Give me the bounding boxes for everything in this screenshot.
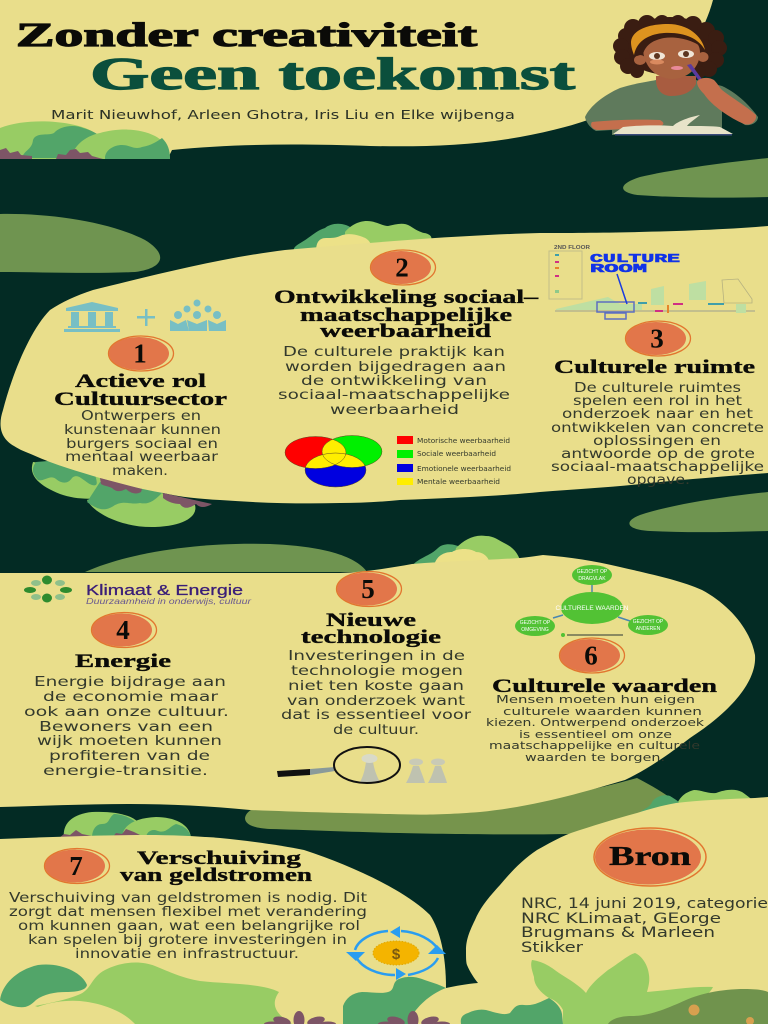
illustration: bottom foliage [0,953,768,1024]
decorative olive band [245,778,676,834]
section 6 text: Mensen moeten hun eigen [496,693,695,706]
section 1 text: Ontwerpers en [81,408,201,424]
badge 5: 5 [361,574,375,604]
section 4 text: Energie bijdrage aan [34,674,226,690]
bush middle center [412,536,520,566]
section 6 text [486,693,705,764]
left iris [654,53,660,59]
section 5 text: niet ten koste gaan [288,678,464,694]
section 7 text: om kunnen gaan, wat een belangrijke rol [18,918,360,934]
section 3 text: opgave. [627,472,690,488]
bron badge: Bron [609,841,691,871]
lips [671,66,683,70]
right iris [683,51,689,57]
section 5 heading: technologie [301,627,441,648]
diagram: culturele waarden: GEZICHT OP [633,619,664,625]
bron text: Brugmans & Marleen [521,925,715,941]
section 5 text: van onderzoek want [287,693,465,709]
section 2 text [278,344,510,418]
badge 5 [336,572,402,606]
illustration: person [585,15,758,136]
badge 6 [560,638,624,673]
section 7 heading: Verschuiving [137,848,302,869]
section 6 text: is essentieel om onze [519,728,672,741]
section 4 text: energie-transitie. [43,763,208,779]
diagram: culturele waarden: OMGEVING [521,627,549,633]
section 1 text: maken. [112,463,168,479]
bush lower left [59,812,191,838]
section 6 heading: Culturele waarden [492,676,718,697]
headband [631,24,705,55]
section 2 text: De culturele praktijk kan [283,344,505,360]
purple plants on bush [100,478,212,508]
cheek [650,60,664,64]
neck and chest [656,76,696,96]
diagram: culturele waarden: GEZICHT OP [520,620,551,626]
section 2 heading: maatschappelijke [300,305,512,326]
section 1 heading: Cultuursector [54,389,228,410]
right ear [698,52,708,62]
title line 2: Geen toekomst [90,48,576,99]
shirt [585,80,758,135]
section 2 text: sociaal-maatschappelijke [278,387,510,403]
badge 3: 3 [650,324,664,354]
diagram: culturele waarden: DRAGVLAK [578,576,606,582]
venn legend: Mentale weerbaarheid [417,478,500,486]
section 4 text [24,674,229,779]
pen [687,64,709,90]
diagram: culturele waarden: GEZICHT OP [577,569,608,575]
authors: Marit Nieuwhof, Arleen Ghotra, Iris Liu en Elke wijbenga [51,108,515,122]
section 7 text [9,890,367,962]
face [643,37,700,79]
venn legend: Motorische weerbaarheid [417,437,510,445]
section 3 text [551,380,764,488]
panel: header background [0,0,713,158]
section 5 text: Investeringen in de [288,648,465,664]
section 3 heading: Culturele ruimte [554,357,755,378]
section 5 heading [301,610,441,648]
icon: money cycle: $ [392,946,401,963]
culture room label: ROOM [590,262,647,276]
badge 1: 1 [133,338,147,368]
decorative olive hill right middle [629,492,768,532]
venn legend: Emotionele weerbaarheid [417,465,511,473]
section 6 text: maatschappelijke en culturele [489,739,700,752]
section 5 text: technologie mogen [291,663,463,679]
logo: Klimaat en Energie [24,576,251,606]
venn diagram [285,436,382,487]
diagram: culturele waarden [515,565,668,637]
badge 2: 2 [395,252,409,282]
section 3 text: De culturele ruimtes [574,380,741,396]
bron text: NRC, 14 juni 2019, categorie [521,896,768,912]
section 3 text: sociaal-maatschappelijke [551,459,764,475]
section 1 text: kunstenaar kunnen [64,422,221,438]
section 4 text: de economie maar [43,689,219,705]
section 5 text [281,648,472,738]
left ear [634,55,646,65]
panel: upper yellow blob [1,226,768,503]
hair [613,15,727,78]
diagram: culturele waarden: ANDEREN [636,626,661,632]
section 5 heading: Nieuwe [326,610,416,631]
right arm and hand [697,78,756,125]
venn legend [397,436,511,486]
bush lower right [636,790,756,817]
hair fringe [637,34,700,56]
section 7 text: Verschuiving van geldstromen is nodig. Dit [9,890,367,906]
section 4 text: Bewoners van een [39,719,213,735]
section 2 heading [274,287,539,342]
panel: lower left yellow blob [0,835,446,1024]
floor plan: culture room: 2ND FLOOR [554,245,590,251]
section 6 text: culturele waarden kunnen [503,705,702,718]
decorative olive hill right top [623,158,768,198]
left eye [649,52,665,60]
bush upper center [294,221,431,252]
bron text: Stikker [521,940,583,956]
badge 4: 4 [116,615,130,645]
bron badge [594,828,706,886]
icon: people [170,300,226,331]
panel: middle yellow blob [0,555,755,815]
logo: Klimaat en Energie: Duurzaamheid in onderwijs, cultuur [86,597,251,606]
badge 7 [44,848,110,884]
floor plan: culture room [549,245,755,319]
section 7 heading: van geldstromen [120,865,313,886]
section 2 heading: weerbaarheid [320,321,492,342]
section 2 text: worden bijgedragen aan [285,359,506,375]
icon: money cycle [346,926,446,980]
venn legend: Sociale weerbaarheid [417,450,496,458]
section 2 text: de ontwikkeling van [301,373,487,389]
panel: lower right yellow blob [408,797,768,1024]
section 3 text: onderzoek naar en het [562,406,753,422]
section 2 text: weerbaarheid [330,402,459,418]
section 4 text: wijk moeten kunnen [37,733,222,749]
section 3 text: spelen een rol in het [573,393,742,409]
culture room label [590,252,680,276]
icon: magnifier with pawns [277,747,447,783]
left forearm [591,120,663,130]
section 5 text: de cultuur. [333,722,419,738]
section 3 text: ontwikkelen van concrete [551,420,764,436]
section 3 text: antwoorde op de grote [561,446,755,462]
book edge [615,134,732,136]
title line 1: Zonder creativiteit [16,17,478,54]
bush left of section 1 [32,460,195,527]
decorative olive hill middle [85,544,367,572]
bron text [521,896,768,956]
badge 4 [92,612,156,648]
section 1 heading [54,371,228,410]
culture room label: CULTURE [590,252,680,266]
section 1 text [64,408,221,479]
section 7 text: innovatie en infrastructuur. [75,946,299,962]
diagram: culturele waarden: CULTURELE WAARDEN [556,605,629,612]
section 4 text: ook aan onze cultuur. [24,704,229,720]
badge 1 [108,336,174,371]
section 1 text: burgers sociaal en [66,436,218,452]
bron text: NRC KLimaat, GEorge [521,911,721,927]
section 7 heading [120,848,313,886]
section 7 text: zorgt dat mensen flexibel met verandering [9,904,367,920]
right eye [678,50,694,58]
badge 7: 7 [69,851,83,881]
section 5 text: dat is essentieel voor [281,707,472,723]
section 4 heading: Energie [75,651,171,672]
section 2 heading: Ontwikkeling sociaal– [274,287,539,308]
section 1 heading: Actieve rol [75,371,206,392]
icon: plus [137,309,155,326]
decorative olive hill left [0,214,160,273]
section 4 text: profiteren van de [49,748,210,764]
icon: museum [64,302,120,332]
badge 6: 6 [584,640,598,670]
bush in header [0,121,170,159]
section 7 text: kan spelen bij grotere investeringen in [28,932,347,948]
section 6 text: waarden te borgen. [525,751,665,764]
logo: Klimaat en Energie: Klimaat & Energie [86,582,243,599]
book [613,115,733,134]
badge 3 [626,321,690,356]
section 1 text: mentaal weerbaar [65,449,219,465]
section 6 text: kiezen. Ontwerpend onderzoek [486,716,705,729]
badge 2 [370,250,436,285]
section 3 text: oplossingen en [593,433,721,449]
